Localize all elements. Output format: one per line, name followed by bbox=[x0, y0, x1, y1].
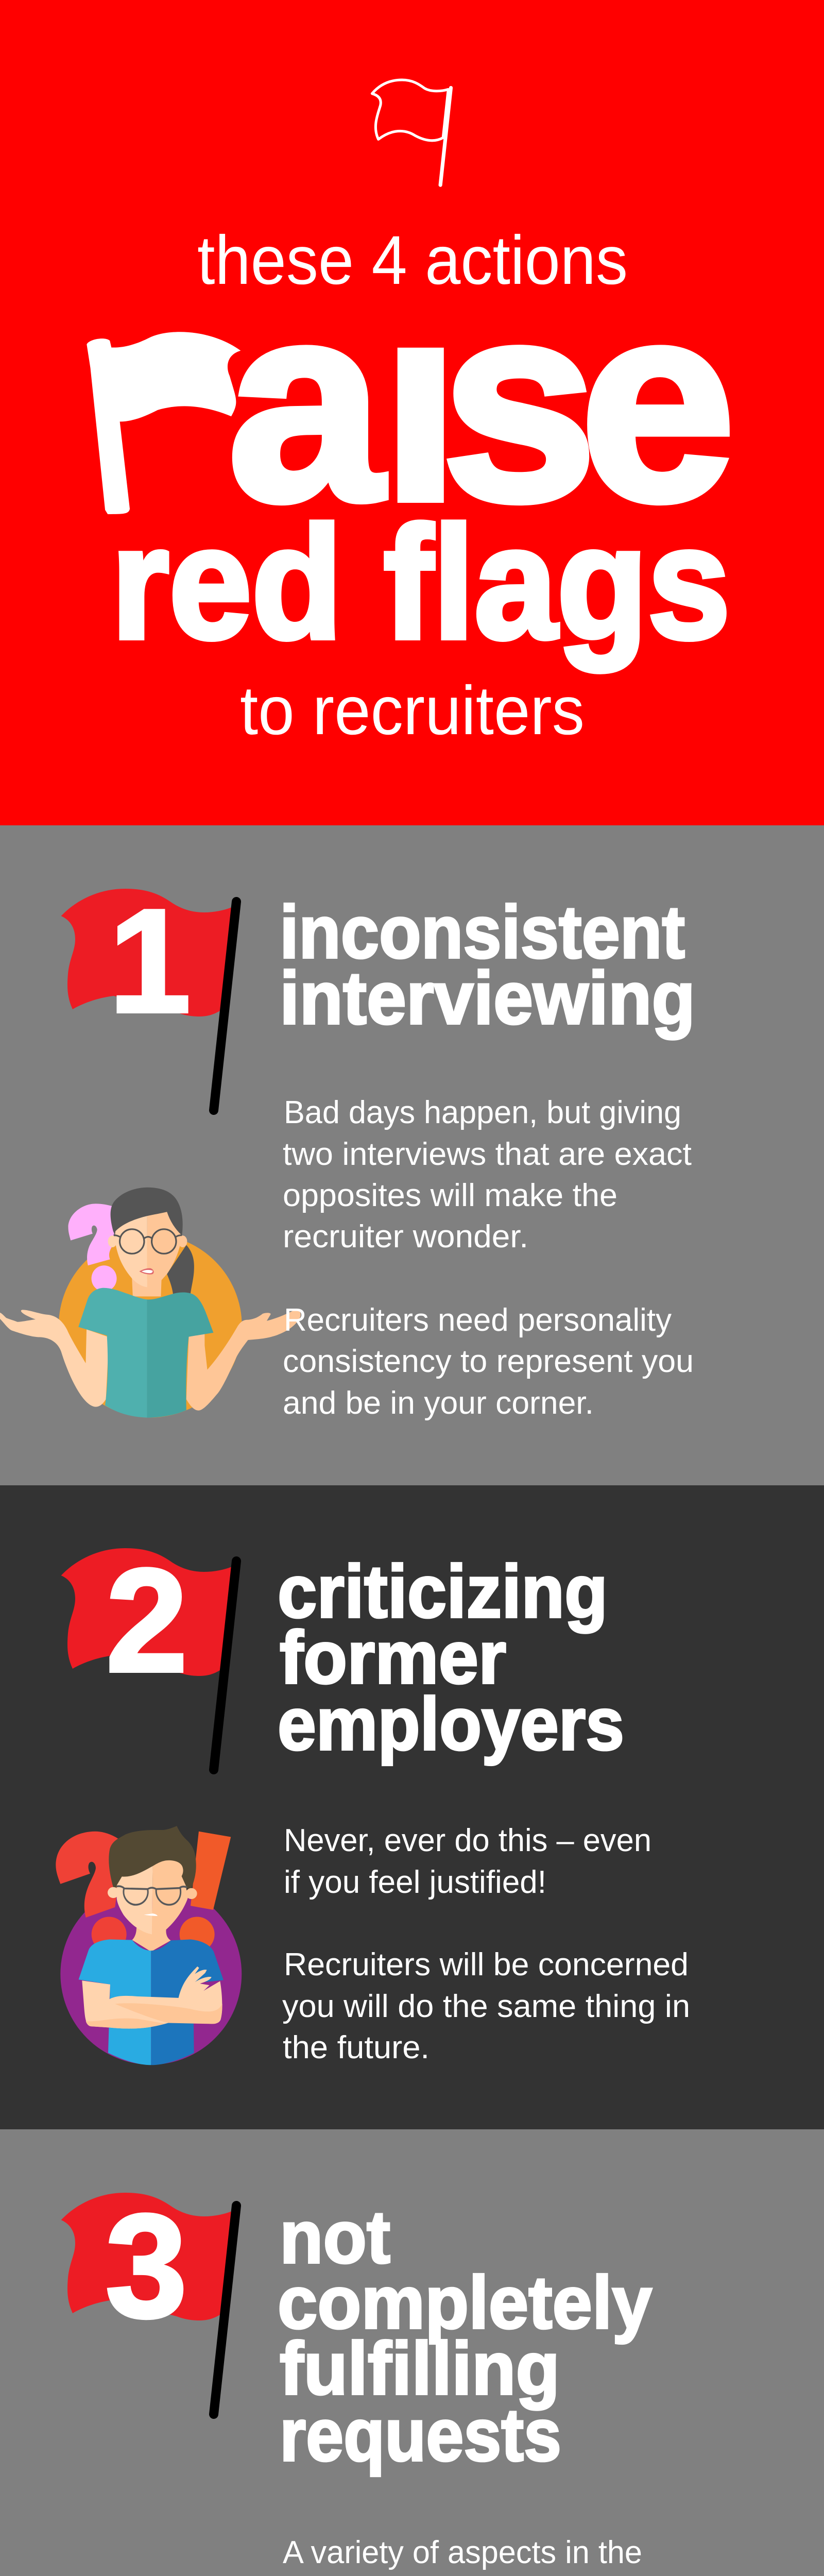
heading: inconsistent interviewing: interviewing bbox=[280, 956, 695, 1040]
heading: raise: aise bbox=[228, 247, 735, 558]
text: criticizing former employers body: the future. bbox=[283, 2030, 430, 2065]
text: inconsistent interviewing body: two interviews that are exact bbox=[283, 1137, 692, 1172]
text: inconsistent interviewing body: and be in your corner. bbox=[283, 1385, 594, 1421]
heading: red flags: red flags bbox=[111, 493, 730, 673]
illustration: shrugging woman with question mark bbox=[0, 1188, 301, 1418]
icon: small outlined flag bbox=[372, 80, 451, 185]
text: inconsistent interviewing body: Recruiters need personality bbox=[284, 1302, 672, 1338]
icon: numbered red flag 1 bbox=[61, 878, 236, 1110]
heading: these 4 actions: these 4 actions bbox=[197, 222, 628, 299]
heading: to recruiters: to recruiters bbox=[240, 672, 585, 749]
heading: inconsistent interviewing: inconsistent bbox=[280, 890, 685, 974]
text: criticizing former employers body: if you feel justified! bbox=[284, 1865, 546, 1900]
icon: numbered red flag 2: 2 bbox=[106, 1538, 188, 1703]
text: inconsistent interviewing body bbox=[283, 1095, 694, 1421]
heading: not completely fulfilling requests: fulfilling bbox=[280, 2327, 560, 2410]
heading: criticizing former employers bbox=[278, 1550, 624, 1766]
heading: not completely fulfilling requests bbox=[278, 2195, 652, 2477]
text: inconsistent interviewing body: opposites will make the bbox=[283, 1178, 617, 1213]
text: criticizing former employers body: you will do the same thing in bbox=[282, 1989, 690, 2024]
icon: numbered red flag 3 bbox=[61, 2183, 236, 2414]
heading: criticizing former employers: former bbox=[280, 1616, 506, 1699]
text: criticizing former employers body: Recruiters will be concerned bbox=[284, 1947, 689, 1982]
heading: not completely fulfilling requests: not bbox=[280, 2195, 390, 2279]
text: inconsistent interviewing body: recruiter wonder. bbox=[283, 1219, 528, 1255]
panel: 1 inconsistent interviewing bbox=[0, 825, 824, 1485]
panel: 2 criticizing former employers bbox=[0, 1485, 824, 2129]
icon: numbered red flag 3: 3 bbox=[105, 2183, 187, 2348]
illustration: man with crossed arms, question and exclamation marks bbox=[56, 1826, 242, 2065]
panel: 3 not completely fulfilling requests bbox=[0, 2129, 824, 2576]
icon: flag shaped letter r bbox=[87, 332, 241, 514]
heading: not completely fulfilling requests: requests bbox=[280, 2393, 561, 2477]
heading: not completely fulfilling requests: completely bbox=[278, 2261, 652, 2344]
heading: criticizing former employers: employers bbox=[278, 1682, 624, 1766]
panel: hero header bbox=[0, 0, 824, 825]
heading: inconsistent interviewing bbox=[280, 890, 695, 1040]
heading: criticizing former employers: criticizing bbox=[278, 1550, 608, 1633]
text: inconsistent interviewing body: Bad days happen, but giving bbox=[284, 1095, 681, 1130]
text: not completely fulfilling requests body: A variety of aspects in the bbox=[283, 2535, 642, 2570]
text: criticizing former employers body: Never, ever do this – even bbox=[284, 1823, 651, 1858]
text: criticizing former employers body bbox=[282, 1823, 690, 2065]
heading: raise: r bbox=[144, 351, 168, 420]
icon: numbered red flag 2 bbox=[61, 1538, 236, 1770]
icon: numbered red flag 1: 1 bbox=[109, 878, 191, 1043]
text: inconsistent interviewing body: consistency to represent you bbox=[283, 1344, 694, 1379]
